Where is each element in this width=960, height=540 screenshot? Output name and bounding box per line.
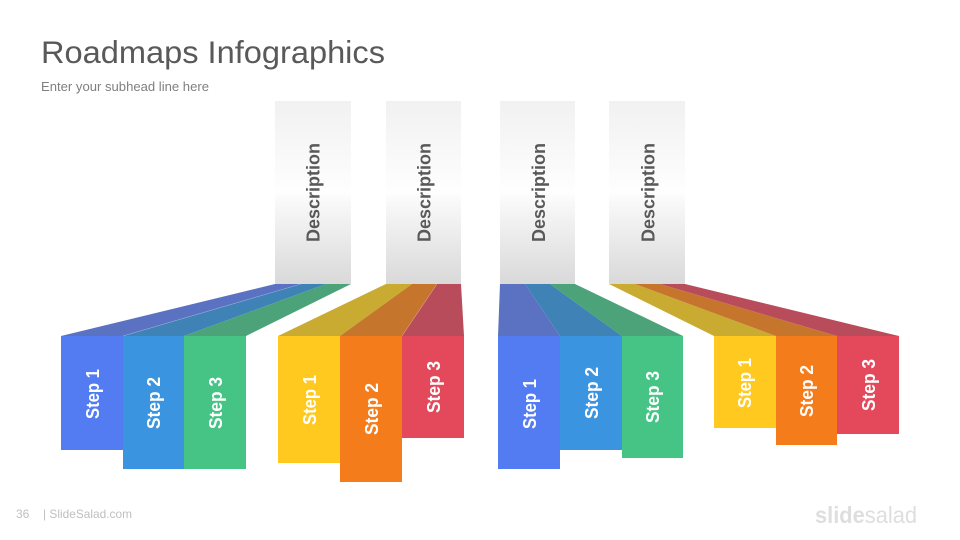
panel: description 4 — [609, 101, 685, 284]
step 3 bar — [402, 336, 464, 438]
step 2 bar — [560, 336, 622, 450]
panel: description 3 — [500, 101, 575, 284]
step 2 bar: Step 2 — [582, 367, 602, 419]
panel: description 3: Description — [529, 143, 549, 242]
step 1 bar: Step 1 — [83, 369, 103, 419]
subhead: Enter your subhead line here — [41, 80, 209, 94]
footer: site name: | SlideSalad.com — [43, 507, 132, 521]
step 1 bar — [714, 336, 776, 428]
step 2 bar — [123, 336, 184, 469]
step 3 bar: Step 3 — [859, 359, 879, 411]
step 1 bar — [278, 336, 340, 463]
logo: slidesalad: slidesalad — [815, 502, 917, 528]
footer: page number: 36 — [16, 507, 30, 521]
connector: group 3 — [498, 284, 683, 336]
connector: group 1 — [61, 284, 351, 336]
roadmap group 1 — [61, 284, 351, 469]
step 1 bar: Step 1 — [300, 375, 320, 425]
step 2 bar — [340, 336, 402, 482]
step 3 bar: Step 3 — [424, 361, 444, 413]
panel: description 2 — [386, 101, 461, 284]
step 2 bar: Step 2 — [797, 365, 817, 417]
step 2 bar — [776, 336, 837, 445]
step 3 bar — [184, 336, 246, 469]
panel: description 1: Description — [304, 143, 324, 242]
step 3 bar: Step 3 — [643, 371, 663, 423]
roadmap group 3 — [498, 284, 683, 469]
step 3 bar: Step 3 — [206, 377, 226, 429]
panel: description 1 — [275, 101, 351, 284]
title: Roadmaps Infographics — [41, 34, 385, 70]
connector: group 4 — [609, 284, 899, 336]
roadmap group 2 — [278, 284, 464, 482]
step 3 bar — [622, 336, 683, 458]
panel: description 2: Description — [414, 143, 434, 242]
step 3 bar — [837, 336, 899, 434]
step 1 bar: Step 1 — [520, 379, 540, 429]
step 1 bar: Step 1 — [735, 358, 755, 408]
panel: description 4: Description — [638, 143, 658, 242]
step 1 bar — [61, 336, 123, 450]
connector: group 2 — [278, 284, 464, 336]
step 2 bar: Step 2 — [362, 383, 382, 435]
step 2 bar: Step 2 — [144, 377, 164, 429]
step 1 bar — [498, 336, 560, 469]
roadmap group 4 — [609, 284, 899, 445]
